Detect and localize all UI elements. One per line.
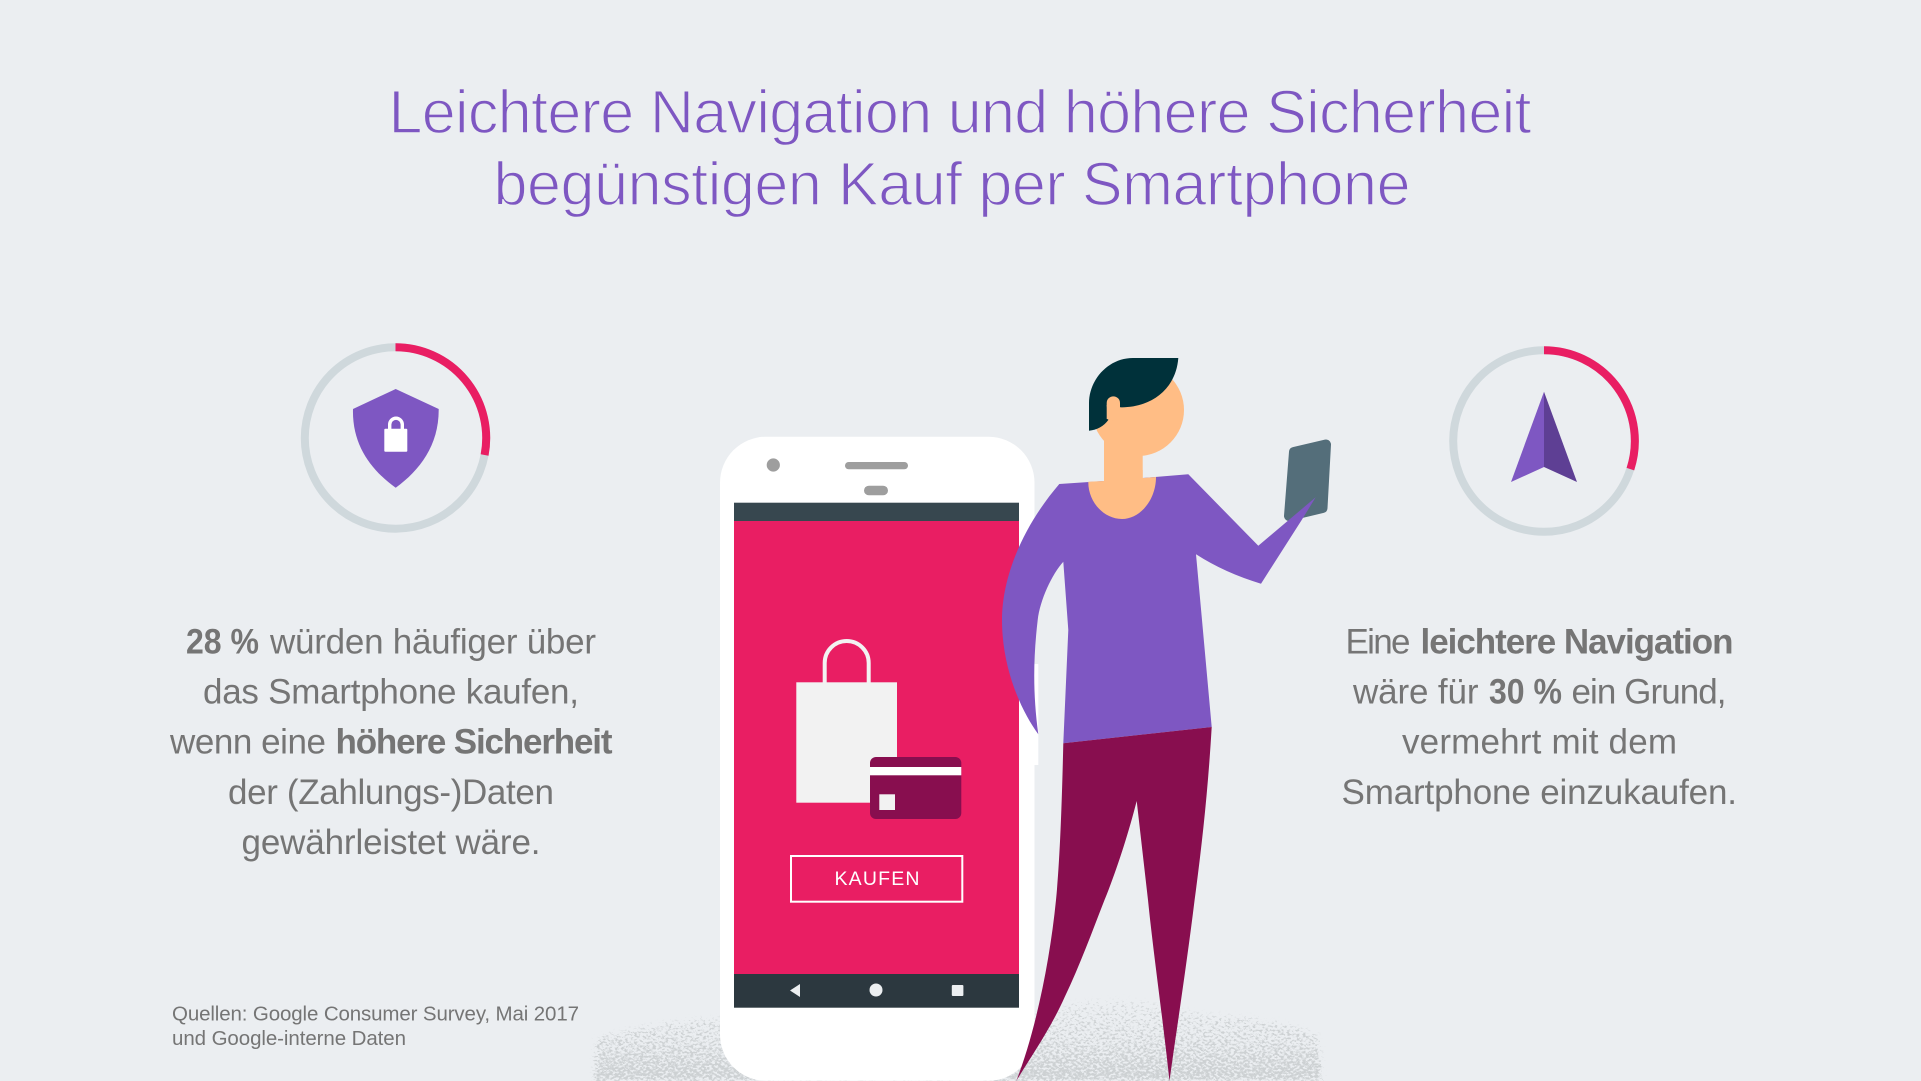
text block: security: 28 % bbox=[186, 622, 259, 662]
phone edge strip bbox=[1034, 664, 1038, 765]
icon: security ring with shield bbox=[305, 347, 486, 529]
tablet bbox=[1289, 444, 1326, 516]
sensor pill bbox=[864, 486, 888, 495]
sweater bbox=[1002, 474, 1316, 743]
hair bbox=[1089, 358, 1178, 431]
text block: security: der (Zahlungs-)Daten bbox=[228, 773, 554, 812]
text block: security: wenn eine bbox=[169, 722, 326, 762]
neck and head bbox=[1092, 364, 1184, 490]
ring: 30% arc bbox=[1544, 350, 1635, 469]
source note: und Google-interne Daten bbox=[172, 1027, 406, 1050]
icon: arrow bbox=[1511, 392, 1577, 482]
trousers bbox=[1016, 727, 1212, 1081]
source note bbox=[172, 1002, 579, 1050]
source note: Quellen: Google Consumer Survey, Mai 2017 bbox=[172, 1002, 579, 1026]
ring: 100% track bbox=[305, 347, 486, 529]
text block: navigation bbox=[1342, 622, 1737, 812]
icon: shield bbox=[353, 389, 439, 488]
icon: navigation ring with arrow bbox=[1453, 350, 1635, 532]
ring: 28% arc bbox=[396, 347, 486, 455]
ear bbox=[1107, 396, 1120, 422]
button: kaufen: KAUFEN bbox=[834, 868, 920, 890]
collar skin bbox=[1088, 470, 1156, 519]
text block: security: würden häufiger über bbox=[269, 622, 596, 662]
text block: navigation: ein Grund, bbox=[1572, 672, 1726, 712]
title: begünstigen Kauf per Smartphone bbox=[494, 150, 1410, 218]
text block: navigation: wäre für bbox=[1352, 672, 1479, 712]
person bbox=[1002, 358, 1326, 1081]
icon: credit card bbox=[870, 757, 961, 819]
speaker bbox=[845, 462, 908, 469]
text block: security bbox=[169, 622, 613, 862]
phone body bbox=[720, 437, 1034, 1081]
text block: security: das Smartphone kaufen, bbox=[203, 672, 579, 712]
screen status bar bbox=[734, 503, 1019, 521]
title bbox=[388, 78, 1532, 218]
icon: padlock bbox=[384, 418, 407, 452]
ground shadow bbox=[594, 1000, 1322, 1081]
icon: recents bbox=[952, 985, 963, 996]
ring: 100% track bbox=[1453, 350, 1635, 532]
icon: home bbox=[870, 984, 882, 996]
text block: navigation: Eine bbox=[1346, 622, 1410, 662]
text block: navigation: Smartphone einzukaufen. bbox=[1342, 773, 1737, 812]
icon: shopping bag bbox=[796, 641, 897, 803]
text block: navigation: 30 % bbox=[1489, 672, 1562, 712]
camera bbox=[767, 458, 780, 472]
text block: security: gewährleistet wäre. bbox=[242, 823, 540, 862]
text block: security: höhere Sicherheit bbox=[336, 722, 613, 762]
text block: navigation: leichtere Navigation bbox=[1420, 622, 1734, 662]
button: kaufen bbox=[791, 856, 962, 902]
icon: back bbox=[790, 984, 800, 997]
phone bbox=[720, 437, 1038, 1081]
screen bbox=[734, 521, 1019, 974]
title: Leichtere Navigation und höhere Sicherheit bbox=[388, 78, 1532, 146]
text block: navigation: vermehrt mit dem bbox=[1402, 722, 1677, 762]
navigation bar bbox=[734, 974, 1019, 1008]
